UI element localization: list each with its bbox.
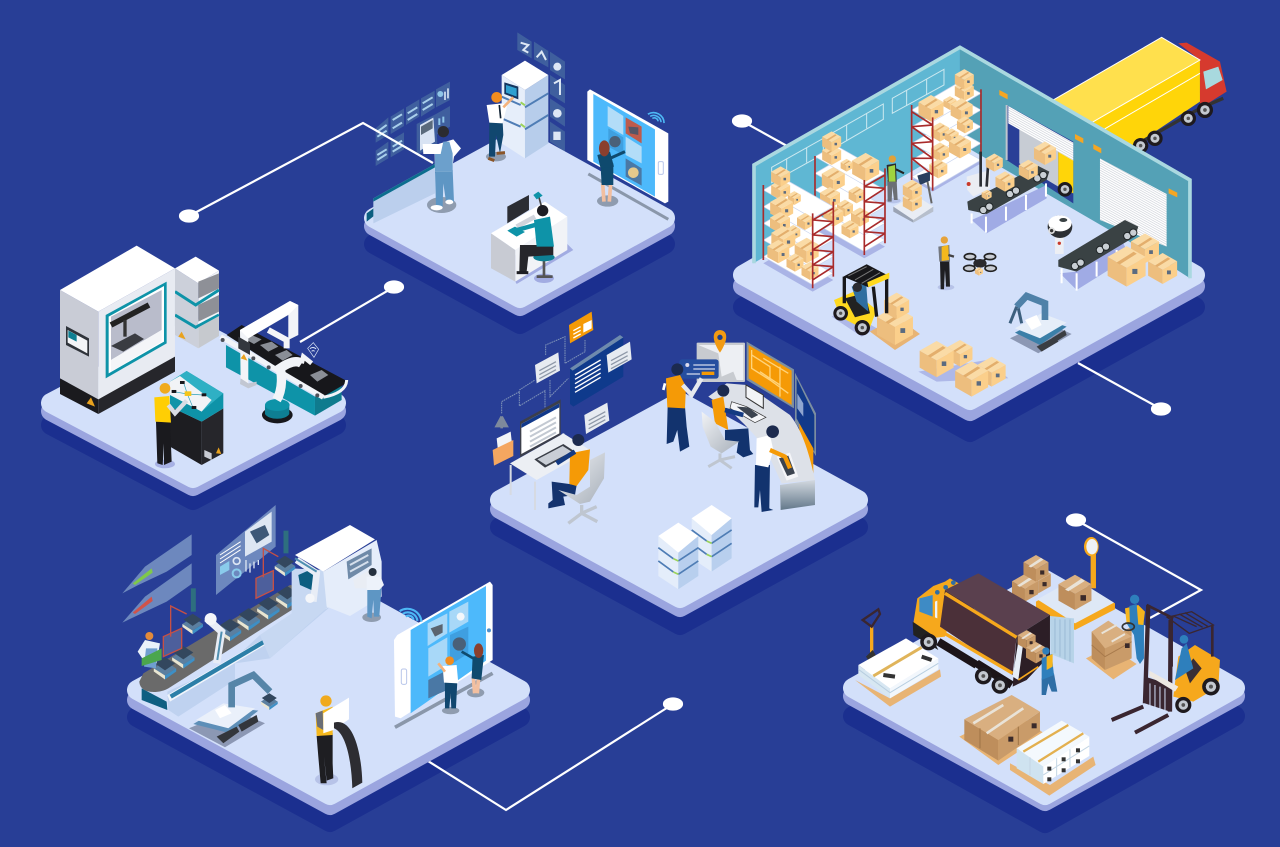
loading robot with box xyxy=(967,152,1003,197)
person: worker at console xyxy=(754,425,790,512)
blue info bubble xyxy=(679,359,719,379)
rail stripe xyxy=(171,605,327,697)
person: standing supervisor xyxy=(663,363,702,452)
conveyor xyxy=(221,325,347,416)
floating icon tiles around the server xyxy=(517,32,565,152)
robot arm on line right xyxy=(275,531,317,603)
panel: production line xyxy=(122,505,520,805)
partition wall xyxy=(367,163,435,223)
round service robot xyxy=(1048,215,1072,254)
person: line inspector xyxy=(138,632,162,668)
white gantry xyxy=(238,301,298,388)
person: woman at tablet xyxy=(462,643,484,697)
rack: front long xyxy=(763,166,833,292)
platform base xyxy=(500,402,858,607)
second roller door xyxy=(1100,158,1167,247)
office contents xyxy=(367,61,668,284)
drone xyxy=(964,254,996,276)
person: worker with tablet xyxy=(886,155,904,203)
wall lamps xyxy=(999,90,1177,197)
platform shadows xyxy=(51,164,1235,823)
robot arm xyxy=(262,357,312,423)
floor boxes xyxy=(918,340,1008,397)
platform base xyxy=(743,145,1195,411)
delivery truck xyxy=(913,573,1074,694)
conveyor one xyxy=(967,160,1049,233)
dark blue document xyxy=(570,335,623,407)
person: loader xyxy=(1018,630,1057,695)
panel: logistics yard xyxy=(853,537,1235,801)
pallet truck handle xyxy=(863,609,880,660)
robot arm on line left xyxy=(182,588,222,663)
side cabinets xyxy=(175,257,219,348)
panel: machining cell xyxy=(51,246,347,486)
data flow lines xyxy=(502,337,585,417)
weighing scale xyxy=(1036,537,1115,630)
warehouse contents xyxy=(753,37,1227,397)
stacked boxes by the conveyor xyxy=(1108,233,1177,287)
conveyor belt xyxy=(139,585,310,692)
map screen xyxy=(697,330,745,382)
connector lines xyxy=(180,116,1201,810)
workstation desk xyxy=(510,399,590,510)
door with shutter and truck xyxy=(1007,105,1073,203)
conveyor two xyxy=(1058,220,1138,291)
server stacks xyxy=(658,505,732,589)
icon: wifi xyxy=(399,605,422,627)
seated dispatcher and chair xyxy=(702,385,753,468)
person: engineer with drawing arc xyxy=(315,695,362,788)
icon: wifi xyxy=(648,110,664,127)
wall top rim xyxy=(754,47,1190,278)
platform base xyxy=(853,580,1235,801)
forklift xyxy=(1112,605,1220,733)
control console xyxy=(170,371,223,465)
forklift with boxes xyxy=(832,264,920,350)
yellow delivery truck xyxy=(1053,37,1227,153)
person: engineer at server xyxy=(486,92,513,161)
engines on belt xyxy=(154,586,299,680)
machining cell contents xyxy=(60,246,347,468)
boxes on pallet near scale xyxy=(1086,621,1137,679)
server tower xyxy=(502,61,548,158)
rack: rear long xyxy=(815,131,885,258)
icon: wifi badge xyxy=(308,343,319,357)
floating data panel xyxy=(216,505,276,595)
rack: rear cross xyxy=(912,69,981,192)
desk with seated worker xyxy=(491,192,573,284)
line base and rail xyxy=(142,600,328,717)
envelope with arrow xyxy=(493,417,513,466)
large tablet xyxy=(394,582,493,727)
person: worker with trolley xyxy=(1122,595,1145,664)
mobile robot rover xyxy=(189,675,278,747)
person: engineer in overalls xyxy=(423,126,461,213)
note cards xyxy=(535,342,632,434)
panel: warehouse xyxy=(743,37,1227,411)
machining unit xyxy=(260,525,382,658)
platform top xyxy=(51,328,336,478)
office chair xyxy=(558,452,605,523)
note card lines xyxy=(539,352,628,429)
curved console xyxy=(708,383,815,510)
white stack on pallet xyxy=(855,638,941,707)
platform base xyxy=(374,138,665,306)
floor scale with box xyxy=(893,172,933,223)
platform top xyxy=(500,402,858,598)
side monitors xyxy=(795,373,816,478)
person: operator xyxy=(154,383,187,468)
tablet screen xyxy=(587,89,668,219)
back right wall xyxy=(960,47,1190,278)
person: machine operator xyxy=(362,568,384,622)
floating dashboard tiles behind the engineer xyxy=(376,82,450,166)
floating status tiles xyxy=(122,534,192,623)
panel: control room xyxy=(493,312,858,607)
red status panels xyxy=(163,548,278,657)
brown boxes on pallet xyxy=(959,695,1045,765)
logistics contents xyxy=(855,537,1220,796)
platform top xyxy=(374,138,665,298)
orange document tile xyxy=(569,312,593,343)
platform top xyxy=(743,145,1195,400)
large CNC machine xyxy=(60,246,175,414)
person: woman at tablet xyxy=(597,140,625,207)
panel: engineering office xyxy=(367,61,668,306)
platform base xyxy=(137,585,520,805)
person: drone operator xyxy=(938,236,954,290)
control room contents xyxy=(493,312,816,589)
person: seated analyst xyxy=(548,434,590,508)
boxes behind truck xyxy=(1012,555,1051,602)
platform base xyxy=(51,328,336,486)
production line contents xyxy=(122,505,493,788)
orange route monitor xyxy=(747,342,794,408)
back left wall xyxy=(753,47,960,263)
platform top xyxy=(137,585,520,795)
robot arm rover xyxy=(1010,296,1072,353)
person: manager at tablet xyxy=(438,656,459,714)
white boxes on pallet xyxy=(1010,721,1096,796)
platform top xyxy=(853,580,1235,795)
